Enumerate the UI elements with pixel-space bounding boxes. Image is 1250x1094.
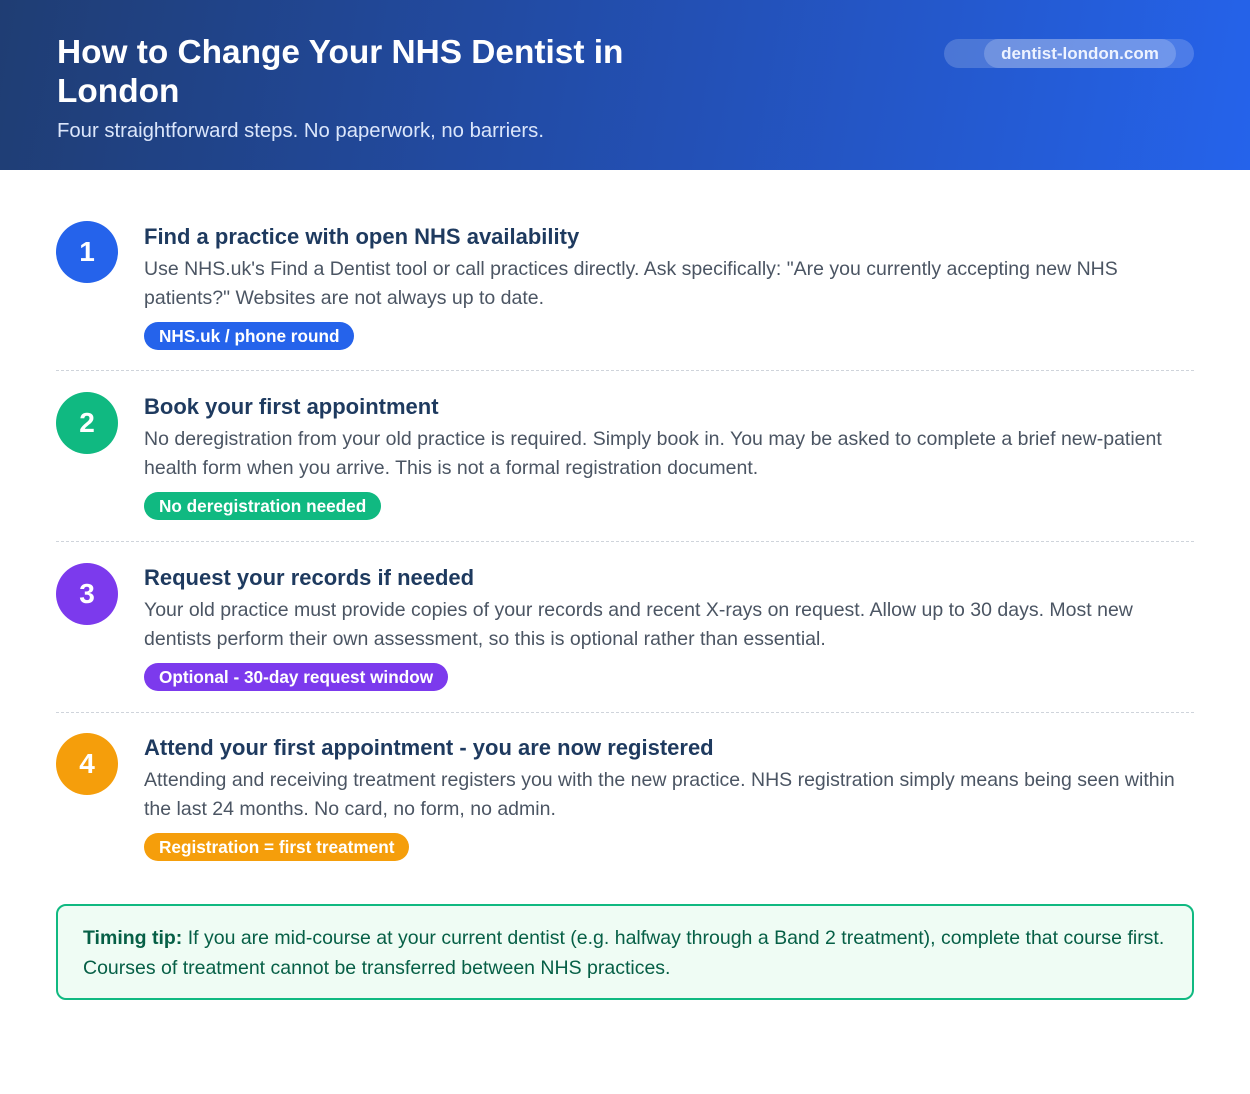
icon: number 2: 2 [79,407,95,438]
title: London [57,73,179,110]
step 2 heading: Book your first appointment [144,394,439,419]
callout: timing tip [56,904,1194,1000]
icon: number 3: 3 [79,578,95,609]
icon: number 1 [56,221,118,283]
icon: number 4: 4 [79,748,95,779]
step 3 tag [144,663,448,691]
step 1 [56,221,1118,350]
step 3 text: Your old practice must provide copies of your records and recent X-rays on request. Allow up to 30 days. Most new dentists perform their own assessment, so this is optional rather than essential. [144,599,1133,650]
step 4 text: Attending and receiving treatment registers you with the new practice. NHS registration simply means being seen within the last 24 months. No card, no form, no admin. [144,769,1175,820]
subtitle: Four straightforward steps. No paperwork, no barriers. [57,120,544,142]
icon: number 3 [56,563,118,625]
step 3 [56,563,1133,691]
step 3 tag: Optional - 30-day request window [159,667,433,687]
title: How to Change Your NHS Dentist in [57,34,623,71]
step 4 heading: Attend your first appointment - you are now registered [144,735,714,760]
step 1 text: Use NHS.uk's Find a Dentist tool or call practices directly. Ask specifically: "Are you currently accepting new NHS patients?" Websites are not always up to date. [144,258,1118,308]
step 4 tag [144,833,409,861]
step 2 text: No deregistration from your old practice is required. Simply book in. You may be asked to complete a brief new-patient health form when you arrive. This is not a formal registration document. [144,428,1162,478]
step 2 [56,392,1162,520]
title [57,34,623,110]
step 4 [56,733,1175,861]
step 1 tag [144,322,354,350]
step 2 tag: No deregistration needed [159,496,366,516]
step 1 heading: Find a practice with open NHS availability [144,224,579,249]
site badge: dentist-london.com [1001,44,1159,63]
site badge [944,39,1194,68]
icon: number 1: 1 [79,236,95,267]
step 4 tag: Registration = first treatment [159,837,394,857]
step 1 tag: NHS.uk / phone round [159,326,339,346]
icon: number 2 [56,392,118,454]
icon: number 4 [56,733,118,795]
step 3 heading: Request your records if needed [144,565,474,590]
callout: timing tip: Timing tip: If you are mid-course at your current dentist (e.g. halfway through a Band 2 treatment), complete that course first. Courses of treatment cannot be transferred between NHS practices. [83,927,1164,979]
step 2 tag [144,492,381,520]
header banner [0,0,1250,170]
